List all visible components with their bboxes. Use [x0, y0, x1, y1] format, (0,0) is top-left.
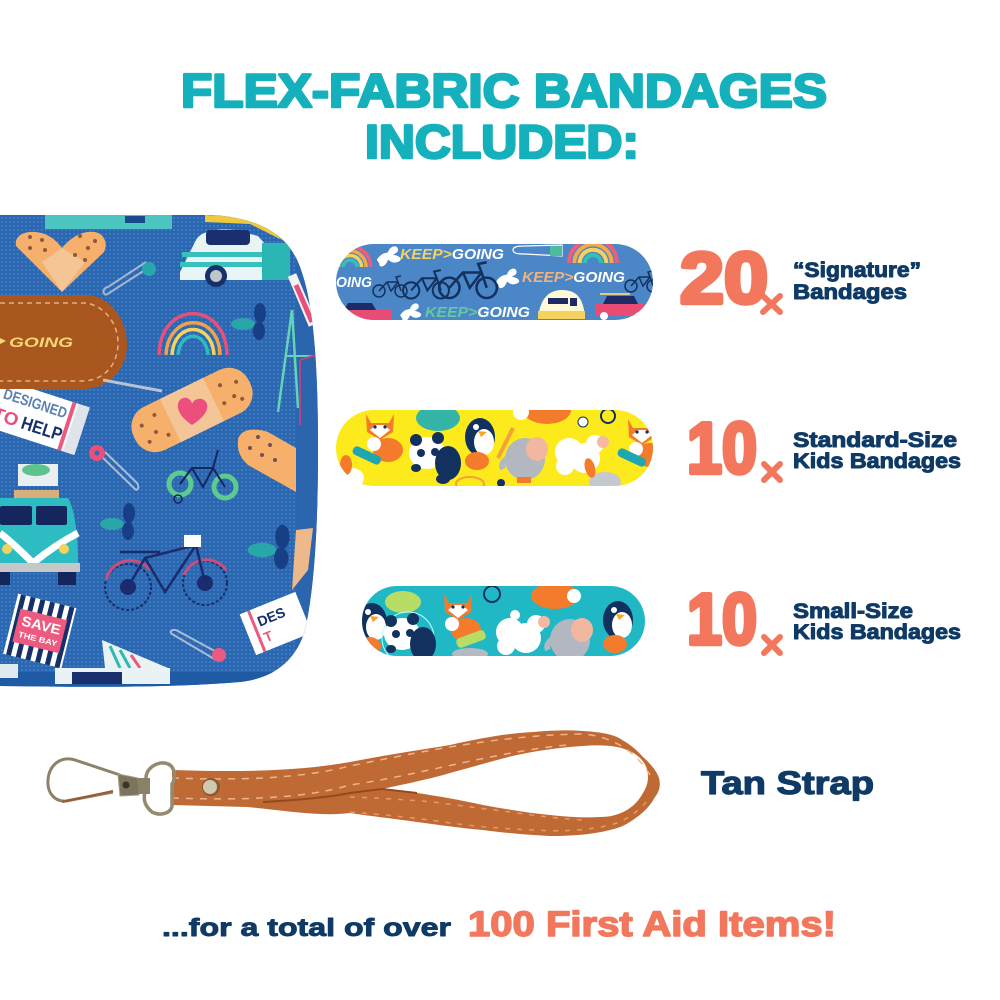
pink car: [595, 293, 645, 320]
save the bay sign: SAVE: [20, 613, 63, 638]
count: 10 small-size bandages: Kids Bandages: [793, 621, 961, 644]
footer: [162, 905, 836, 944]
top print strip: [45, 215, 172, 229]
clipped ticket print: T: [261, 627, 276, 645]
pink safety pin print: [90, 446, 138, 490]
clipped ticket print: DES: [255, 604, 288, 629]
ticket: designed to help: HELP: [19, 413, 65, 445]
clipped side bandage print: [238, 430, 296, 492]
count: 20 signature bandages: [680, 239, 921, 319]
rivet: [202, 778, 220, 796]
metal clasp: [48, 759, 175, 814]
lower safety pin print: [171, 630, 225, 661]
title: [181, 64, 827, 168]
bandage: signature: KEEP>GOING: [425, 304, 530, 321]
footer: ...for a total of over: [162, 914, 451, 942]
pouch with printed fabric: [0, 210, 325, 690]
count: 20 signature bandages: “Signature”: [793, 259, 921, 282]
count: 10 small-size bandages: 10: [687, 580, 757, 660]
leather patch: GOING: [9, 334, 73, 350]
count: 10 standard-size bandages: Kids Bandages: [793, 450, 961, 473]
ticket: designed to help: [0, 389, 90, 455]
count: 10 small-size bandages: [687, 580, 961, 660]
count: 20 signature bandages: 20: [680, 239, 768, 319]
leaves print: [100, 303, 290, 569]
bandage: standard kids: [336, 410, 653, 486]
title: FLEX-FABRIC BANDAGES: [181, 64, 827, 117]
multiply sign: [764, 464, 780, 480]
camper van print: [180, 215, 290, 287]
camper: [538, 290, 585, 319]
count: 10 standard-size bandages: 10: [687, 409, 757, 489]
ticket: designed to help: DESIGNED: [1, 386, 69, 422]
heart bandage print: [16, 232, 106, 292]
leather patch: [0, 295, 127, 389]
count: 20 signature bandages: Bandages: [793, 281, 907, 304]
save the bay sign: [3, 594, 76, 668]
multiply sign: [763, 296, 780, 312]
right edge print: [278, 275, 316, 425]
bandage print with heart: [131, 368, 253, 452]
rainbow print: [159, 314, 227, 355]
clipped ticket print: [240, 592, 312, 655]
count: 10 standard-size bandages: [687, 409, 961, 489]
safety pin print: [104, 262, 155, 295]
title: INCLUDED:: [365, 115, 639, 168]
bandage: signature: OING: [336, 274, 372, 291]
multiply sign: [764, 637, 780, 653]
bottom print strip: [0, 640, 170, 684]
city bike print: [105, 535, 227, 610]
van print: [0, 464, 80, 585]
bandage: signature: KEEP>GOING: [522, 269, 625, 286]
tan strap label: Tan Strap: [701, 765, 874, 801]
tan strap: [48, 730, 660, 836]
bandage: small kids: [362, 586, 645, 656]
bandage: signature: [336, 244, 653, 320]
count: 10 small-size bandages: Small-Size: [793, 600, 913, 623]
count: 10 standard-size bandages: Standard-Size: [793, 429, 957, 452]
save the bay sign: THE BAY: [17, 630, 59, 649]
bandage: signature: KEEP>GOING: [400, 246, 504, 263]
footer: 100 First Aid Items!: [468, 905, 836, 944]
child bike print: [169, 450, 236, 503]
left car: [346, 303, 392, 320]
